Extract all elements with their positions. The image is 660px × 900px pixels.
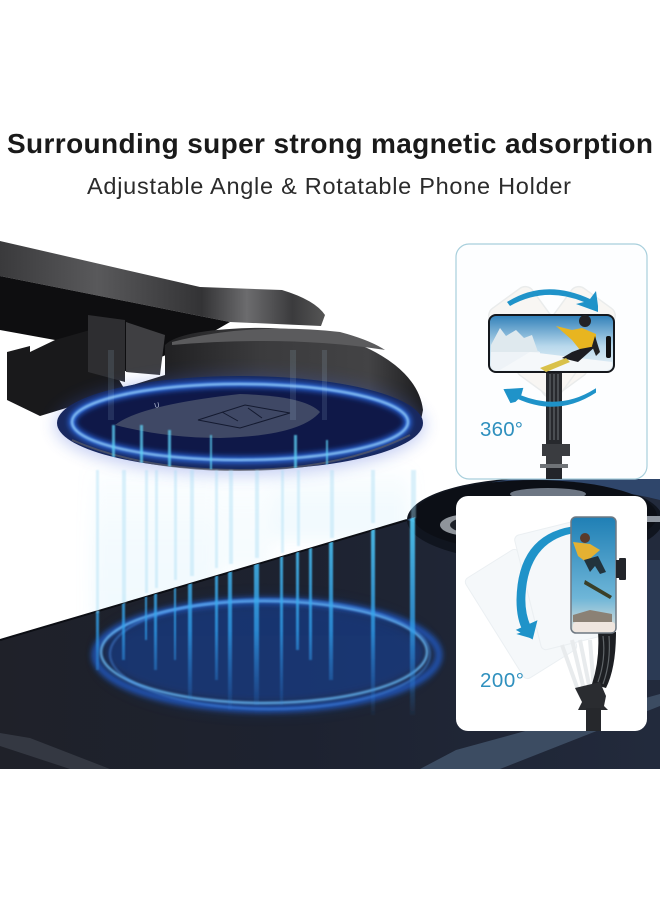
magnet hub body — [62, 328, 423, 425]
vertical phone with skater — [571, 517, 626, 633]
disc label plate — [115, 394, 320, 438]
ghost phones — [485, 283, 619, 401]
faint beams over hub — [108, 350, 327, 420]
tilt arrow — [517, 527, 572, 638]
pale beams below disc — [96, 470, 416, 613]
infographic canvas — [0, 133, 660, 769]
rotating arm — [592, 632, 616, 688]
magnetic beams on the phone — [96, 500, 415, 715]
mount joint — [542, 444, 570, 466]
camera module — [407, 478, 660, 562]
panel: 200 degree tilt — [456, 496, 647, 731]
beams through disc — [112, 425, 328, 470]
top arrow — [507, 289, 598, 312]
label 360: 360° — [480, 418, 523, 441]
magnet disc: U — [154, 402, 160, 410]
magnetic beams above the phone — [92, 470, 410, 620]
phone edge highlight — [0, 520, 407, 640]
phone lower left bezel — [0, 733, 110, 769]
subtitle: Adjustable Angle & Rotatable Phone Holder — [87, 173, 571, 199]
holder arm — [0, 241, 325, 326]
title: Surrounding super strong magnetic adsorption — [7, 128, 653, 159]
clip block — [88, 315, 125, 382]
phone clip — [7, 330, 125, 416]
holder black strut — [0, 276, 230, 380]
phone back — [0, 478, 660, 769]
magnetic holder — [0, 241, 425, 475]
horizontal phone with skier — [489, 315, 614, 372]
stem — [546, 372, 562, 467]
mount joint — [575, 682, 608, 710]
skater — [580, 533, 590, 543]
ghost phones — [463, 521, 602, 680]
magnet disc — [55, 375, 425, 475]
phone lower right bezel — [420, 694, 660, 769]
label 200: 200° — [480, 669, 524, 692]
ghost arm fan — [562, 640, 594, 690]
magnetic ring on phone — [95, 599, 439, 710]
bottom arrow — [505, 389, 595, 406]
panel: 360 degree rotation — [456, 244, 647, 479]
skier — [556, 326, 596, 350]
phone right side shade — [647, 560, 660, 680]
